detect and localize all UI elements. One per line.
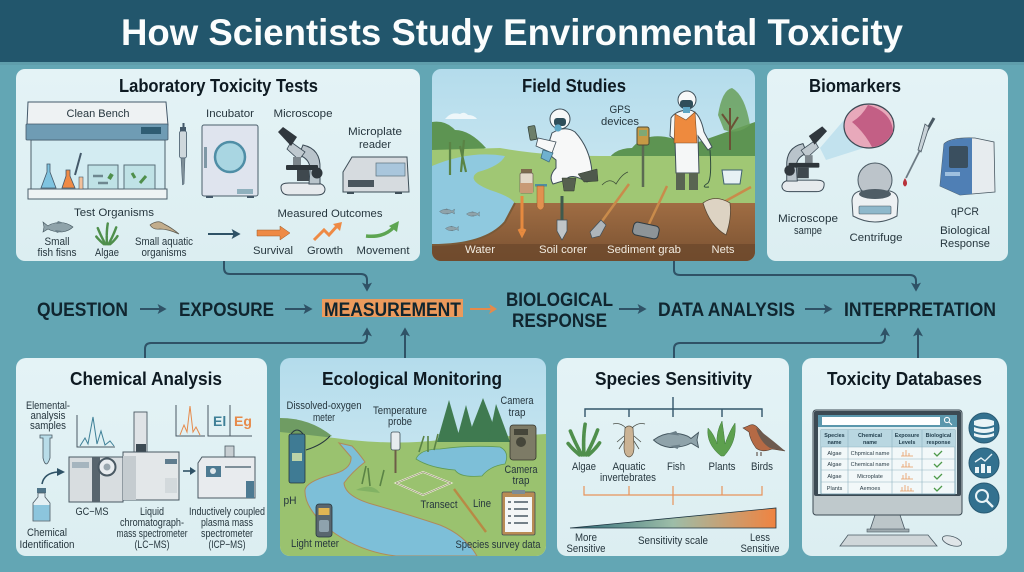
element: transect line (454, 489, 486, 532)
panel: chemical analysis (16, 358, 267, 556)
label: LC-MS: mass spectrometer (116, 528, 188, 540)
label: temperature probe: Temperature (373, 405, 427, 417)
heading: toxicity databases: Toxicity Databases (827, 369, 982, 389)
connector: species sensitivity to interpretation (674, 330, 885, 358)
organism: small aquatic organisms (135, 222, 193, 259)
label: microscope: Microscope (274, 108, 332, 120)
organism: algae (95, 224, 119, 259)
species: aquatic invertebrates: invertebrates (600, 472, 656, 484)
label: birds: Birds (751, 461, 773, 473)
label: ICP-MS: plasma mass (201, 517, 253, 529)
figure: standing scientist with vest (670, 91, 712, 190)
flow: process chain (37, 290, 996, 332)
label: microplate: Microplate (348, 126, 402, 138)
species: algae (568, 424, 600, 473)
label: microscope sampe: Microscope (778, 213, 838, 225)
table: species records: Levels (899, 440, 915, 446)
heading: laboratory toxicity tests: Laboratory Toxicity Tests (119, 76, 318, 96)
icon: temperature probe (373, 405, 427, 473)
label: less sensitive: Less (750, 532, 770, 544)
table: species records: Chpmical name (851, 451, 889, 457)
label: soil corer: Soil corer (539, 244, 587, 256)
panel: toxicity databases (802, 358, 1007, 556)
table: species records: Algae (827, 451, 842, 457)
icon: light meter (291, 504, 339, 550)
icon: qPCR machine: Response (940, 238, 990, 250)
table: species records: Species (824, 433, 845, 439)
label: LC-MS: chromatograph- (120, 517, 184, 529)
icon: microplate reader (343, 126, 409, 194)
heading: species sensitivity: Species Sensitivity (595, 369, 752, 389)
bracket: sensitivity ranks (584, 486, 762, 505)
icon: spade (557, 196, 567, 240)
element: survey quadrat (396, 472, 451, 495)
label: clean bench: Clean Bench (66, 108, 130, 120)
table: species records: name (827, 440, 842, 446)
label: transect: Transect (420, 499, 458, 511)
icon: GPS device: devices (601, 116, 640, 128)
arrow: data analysis to interpretation (805, 308, 830, 310)
label: more sensitive: More (575, 532, 597, 544)
table: species records: Algae (827, 462, 842, 468)
icon: ICP-MS instrument (189, 446, 265, 551)
label: growth: Growth (307, 245, 343, 257)
label: species survey data: Species survey data (456, 539, 541, 551)
label: reader: reader (359, 139, 391, 151)
label: qPCR: qPCR (951, 206, 979, 218)
icon: camera trap: trap (512, 475, 530, 487)
step: measurement: MEASUREMENT (324, 300, 461, 321)
chart: sensitivity wedge (570, 508, 776, 528)
label: camera trap top: Camera (500, 395, 534, 407)
label: movement: Movement (356, 245, 410, 257)
label: centrifuge: Centrifuge (850, 232, 902, 244)
panel: biomarkers (767, 69, 1008, 261)
heading: biomarkers: Biomarkers (809, 76, 901, 96)
label: GPS devices: GPS (610, 104, 630, 116)
table: species records: Microplate (857, 474, 883, 480)
label: light meter: Light meter (291, 538, 339, 550)
label: biological response: Biological (940, 225, 990, 237)
icon: incubator (202, 108, 258, 198)
connector: chemical analysis to measurement (145, 330, 367, 358)
element: forest (437, 398, 510, 442)
panel: laboratory toxicity tests (16, 69, 420, 261)
connector: toxicity databases to interpretation (917, 330, 919, 358)
element panel: El and Eg (208, 405, 252, 436)
table: species records: Chemical (858, 433, 882, 439)
step: exposure: EXPOSURE (179, 300, 274, 321)
icon: clean bench (26, 102, 168, 199)
table: species records: Exposure (895, 433, 919, 439)
icon: clipboard survey (502, 490, 535, 535)
icon: keyboard (840, 535, 937, 546)
table: species records: Plants (827, 486, 842, 492)
panel: chemical analysis: Identification (20, 539, 74, 551)
label: aquatic invertebrates: Aquatic (612, 461, 646, 473)
label: LC-MS: Liquid (140, 506, 164, 518)
icon: pipette (180, 123, 186, 185)
label: small fish fisns: Small (44, 236, 70, 248)
table: species records: response (927, 440, 950, 446)
icon: orange soil probe (519, 196, 525, 235)
label: test organisms: Test Organisms (74, 207, 155, 219)
label: camera trap: Camera (504, 464, 538, 476)
element: fish in water (440, 208, 480, 231)
icon: temperature probe: probe (388, 416, 412, 428)
label: small aquatic organisms: Small aquatic (135, 236, 193, 248)
organism: small aquatic organisms: organisms (142, 247, 187, 259)
species: plants (708, 421, 736, 473)
element: river (305, 443, 477, 556)
arrow: question to exposure (140, 308, 164, 310)
icon: camera trap (504, 425, 538, 487)
chart: orange chromatogram (176, 405, 205, 436)
arrow: organisms to outcomes (208, 233, 238, 235)
table: species records: Algae (827, 474, 842, 480)
step: biological response (506, 290, 613, 332)
figure: kneeling scientist (528, 109, 598, 191)
label: pH: pH (284, 495, 297, 507)
label: incubator: Incubator (206, 108, 254, 120)
icon: bucket (722, 170, 742, 184)
title: How Scientists Study Environmental Toxicity (121, 12, 903, 53)
icon: net (703, 187, 751, 235)
tree diagram (585, 397, 762, 417)
organism: small fish: fish fisns (38, 247, 77, 259)
icon: sample tube (40, 435, 52, 464)
icon: microscope with tissue magnification: sampe (794, 225, 822, 237)
arrow: exposure to measurement (285, 308, 310, 310)
icon: qPCR machine (940, 138, 995, 250)
icon: GC-MS and LC-MS instrument (69, 412, 188, 551)
label: algae: Algae (572, 461, 596, 473)
label: algae: Algae (95, 247, 119, 259)
connector: ecological monitoring to measurement (404, 330, 406, 358)
panel: species sensitivity: Sensitive (740, 543, 780, 555)
arrow: LC-MS to ICP-MS (183, 467, 196, 475)
label: ICP-MS: spectrometer (201, 528, 253, 540)
connector: field studies to interpretation (674, 261, 916, 289)
heading: chemical analysis: Chemical Analysis (70, 369, 222, 389)
icon: pipette with drop (904, 118, 934, 186)
outcome: growth (307, 222, 343, 257)
table: species records (821, 430, 955, 494)
element: pond (416, 446, 507, 476)
icon: desktop computer (813, 410, 962, 532)
species: fish (654, 431, 698, 473)
species: bird (743, 425, 785, 473)
label: plants: Plants (708, 461, 736, 473)
icon: chemical bottle (33, 488, 50, 521)
step: question: QUESTION (37, 300, 128, 321)
step: biological response: RESPONSE (512, 311, 607, 332)
panel: chemical analysis: analysis (30, 410, 66, 422)
label: LC-MS (116, 506, 188, 551)
icon: dissolved-oxygen meter: meter (313, 412, 335, 424)
species: aquatic invertebrates (600, 424, 656, 484)
label: elemental-analysis samples: Elemental- (26, 400, 70, 412)
label: sediment grab: Sediment grab (607, 244, 681, 256)
table: species records: name (863, 440, 877, 446)
element: reeds (362, 434, 438, 486)
icon: microscope with tissue magnification (778, 104, 894, 237)
table: species records: Chemical name (851, 462, 889, 468)
element: tree (718, 88, 750, 150)
label: sensitivity scale: Sensitivity scale (638, 535, 708, 547)
label: chemical identification: Chemical (27, 527, 67, 539)
element: reeds (450, 140, 466, 175)
label: nets: Nets (712, 244, 735, 256)
label: measured outcomes: Measured Outcomes (278, 208, 383, 220)
icon: database (969, 413, 999, 443)
label: dissolved-oxygen meter: Dissolved-oxygen (286, 400, 362, 412)
icon: sediment grab (632, 186, 667, 240)
chart: chromatogram (77, 415, 115, 447)
title band (0, 0, 1024, 65)
panel: field studies (432, 69, 755, 261)
panel: species sensitivity: Sensitive (566, 543, 606, 555)
element panel: El and Eg: El (213, 413, 226, 429)
icon: mouse (941, 534, 963, 548)
icon: growth chart (969, 448, 999, 478)
label: water: Water (465, 244, 495, 256)
arrow: biological response to data analysis (619, 308, 644, 310)
icon: soil corer (590, 184, 629, 238)
panel: ecological monitoring: trap (508, 407, 526, 419)
step: data analysis: DATA ANALYSIS (658, 300, 795, 321)
heading: ecological monitoring: Ecological Monitoring (322, 369, 502, 389)
label: survival: Survival (253, 245, 293, 257)
label: ICP-MS (189, 506, 265, 551)
label: ICP-MS: (ICP−MS) (208, 539, 246, 551)
icon: search (969, 483, 999, 513)
outcome: survival (253, 226, 293, 257)
arrow: bottle to instruments (42, 468, 65, 484)
table: species records: Biological (926, 433, 952, 439)
heading: field studies: Field Studies (522, 76, 626, 96)
icon: centrifuge (850, 163, 902, 244)
icon: GPS device (601, 104, 649, 187)
step: interpretation: INTERPRETATION (844, 300, 996, 321)
organism: small fish (38, 221, 77, 259)
icon: microscope (274, 108, 332, 195)
label: GC-MS: GC−MS (76, 506, 108, 518)
outcome: movement (356, 221, 410, 257)
panel: ecological monitoring (280, 358, 546, 556)
element panel: El and Eg: Eg (234, 413, 252, 429)
step: biological response: BIOLOGICAL (506, 290, 613, 311)
icon: dissolved-oxygen meter (286, 400, 362, 483)
icon: sample bottle (520, 169, 547, 210)
panel: chemical analysis: samples (30, 420, 66, 432)
table: species records: Aemoes (860, 486, 880, 492)
label: line: Line (473, 498, 491, 510)
panel: species sensitivity (557, 358, 789, 556)
label: LC-MS: (LC−MS) (134, 539, 170, 551)
arrow: measurement to biological response (470, 304, 497, 314)
label: ICP-MS: Inductively coupled (189, 506, 265, 518)
label: fish: Fish (667, 461, 685, 473)
connector: laboratory to measurement (224, 261, 367, 289)
